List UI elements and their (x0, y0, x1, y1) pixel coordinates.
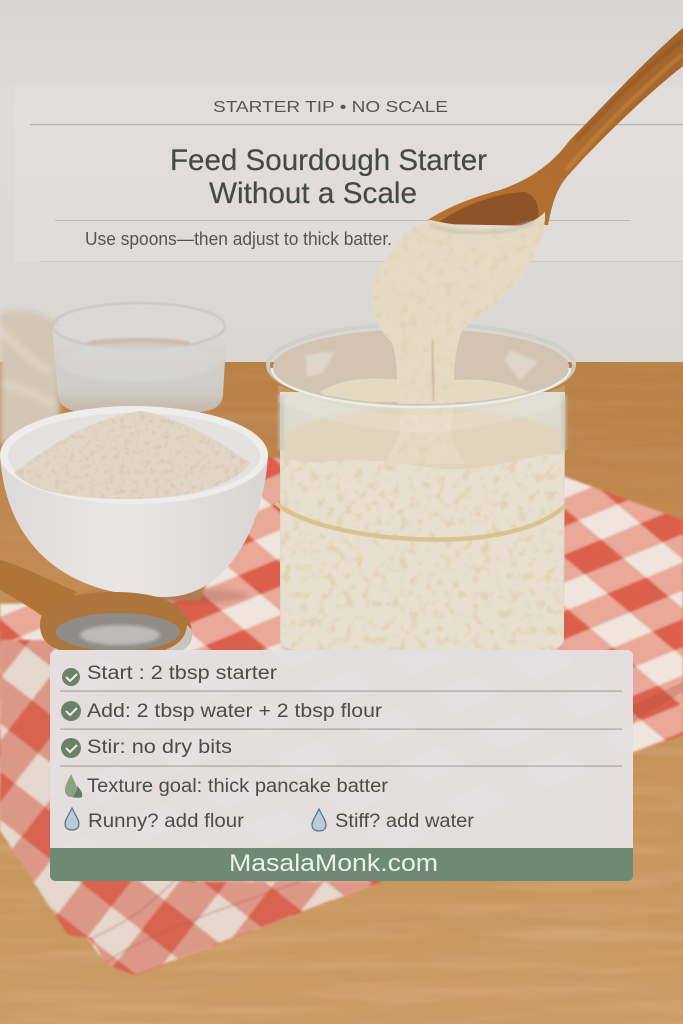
frothy starter layer (284, 408, 561, 480)
jar body (280, 392, 565, 650)
wall background (0, 0, 683, 364)
cloth fold right (633, 682, 683, 722)
title (170, 144, 487, 210)
step: stir: Stir: no dry bits (87, 737, 232, 758)
wooden table (0, 362, 683, 1024)
icon: water drop (65, 808, 79, 830)
icon: check (61, 701, 81, 721)
icon: check (62, 668, 80, 686)
glass jar (268, 324, 574, 656)
footer band (50, 848, 633, 881)
beige linen (0, 310, 60, 445)
jar glass sides (281, 395, 564, 450)
flour (14, 411, 250, 499)
water glass (52, 303, 227, 412)
tip: stiff: Stiff? add water (335, 811, 475, 832)
tip: runny: Runny? add flour (88, 811, 245, 832)
measuring spoon (0, 560, 192, 652)
starter dripping from spoon (371, 212, 545, 464)
steps panel (50, 650, 633, 881)
jar rim front (268, 365, 574, 432)
subtitle: Use spoons—then adjust to thick batter. (85, 229, 392, 249)
white bowl (0, 406, 268, 604)
jar interior (273, 329, 569, 405)
icon: water drop (312, 809, 326, 831)
title: Feed Sourdough Starter (170, 144, 487, 177)
eyebrow label: STARTER TIP • NO SCALE (213, 99, 448, 116)
starter body (281, 454, 563, 650)
footer band: MasalaMonk.com (229, 850, 438, 877)
twine band (276, 503, 566, 540)
icon: green drops (65, 774, 82, 798)
jar rim back (268, 324, 574, 365)
icon: check (61, 738, 81, 758)
step: start: Start : 2 tbsp starter (87, 663, 278, 684)
wooden spoon (425, 28, 683, 226)
header panel (14, 86, 683, 262)
step: add: Add: 2 tbsp water + 2 tbsp flour (87, 701, 383, 722)
title: Without a Scale (209, 177, 417, 210)
texture goal: Texture goal: thick pancake batter (87, 776, 389, 797)
checked cloth (0, 457, 683, 975)
cloth folds lower left (0, 640, 380, 975)
